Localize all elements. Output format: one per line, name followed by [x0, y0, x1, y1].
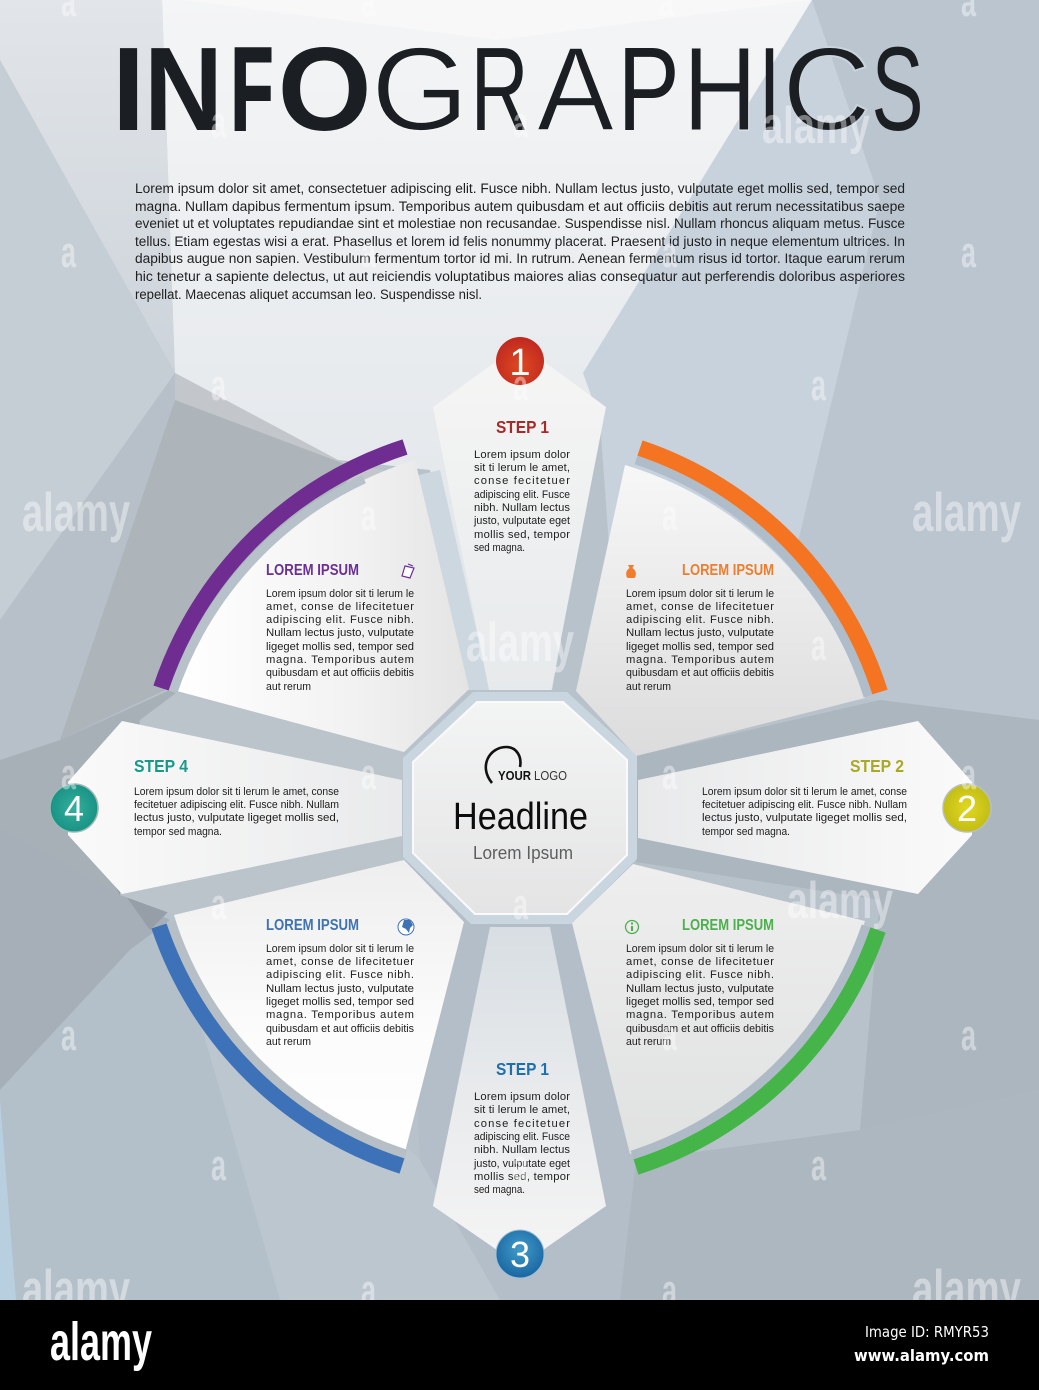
intro text block: eveniet ut et voluptates repudiandae sint et molestiae non recusandae. Suspendisse nisl. Nullam rhoncus aliquam metus. Fusce — [135, 216, 905, 231]
purple text: magna. Temporibus autem — [266, 654, 414, 666]
title: P — [618, 23, 680, 156]
icon: info — [626, 920, 638, 934]
title: I — [758, 23, 780, 156]
blue heading: LOREM IPSUM — [266, 917, 359, 934]
step 3 text: sit ti lerum le amet, — [474, 1104, 570, 1116]
watermark: a — [61, 750, 76, 799]
orange heading: LOREM IPSUM — [682, 562, 774, 579]
blue arc — [159, 926, 402, 1166]
intro text block: magna. Nullam dapibus fermentum ipsum. Temporibus autem quibusdam et aut officiis debitis aut rerum necessitatibus saepe — [135, 199, 905, 214]
badge 2 — [943, 784, 991, 832]
panel: step 3 — [433, 927, 606, 1278]
title: H — [683, 23, 757, 156]
blue text: ligeget mollis sed, tempor sed — [266, 996, 414, 1008]
title: R — [471, 23, 529, 156]
blue text: Lorem ipsum dolor sit ti lerum le — [266, 943, 414, 955]
green text: Lorem ipsum dolor sit ti lerum le — [626, 943, 774, 955]
step 3 heading: STEP 1 — [496, 1059, 549, 1079]
intro text block: tellus. Etiam egestas wisi a erat. Phasellus et lorem id felis nonummy placerat. Praesent id justo in neque elementum ultrices. In — [135, 234, 905, 249]
panel: step 1 — [433, 337, 606, 690]
step 4 text: Lorem ipsum dolor sit ti lerum le amet, conse — [134, 786, 339, 798]
subheadline: Lorem Ipsum — [473, 842, 573, 863]
step 3 text: Lorem ipsum dolor — [474, 1091, 570, 1103]
badge 3 — [496, 1230, 544, 1278]
green text: aut rerum — [626, 1036, 671, 1048]
icon: note — [402, 564, 414, 578]
green heading: LOREM IPSUM — [682, 917, 774, 934]
green arc — [636, 930, 878, 1167]
website: www.alamy.com — [854, 1346, 989, 1365]
title: I — [112, 23, 145, 156]
watermark: a — [211, 1141, 226, 1190]
orange text: aut rerum — [626, 681, 671, 693]
watermark: a — [211, 880, 226, 929]
orange text: Lorem ipsum dolor sit ti lerum le — [626, 588, 774, 600]
watermark: a — [361, 1266, 376, 1315]
blue text: adipiscing elit. Fusce nibh. — [266, 969, 414, 981]
orange text: magna. Temporibus autem — [626, 654, 774, 666]
orange text: ligeget mollis sed, tempor sed — [626, 641, 774, 653]
orange text: adipiscing elit. Fusce nibh. — [626, 614, 774, 626]
watermark: a — [961, 750, 976, 799]
panel: blue quarter — [159, 860, 464, 1166]
badge 1 — [496, 337, 544, 385]
title — [112, 23, 924, 156]
watermark: alamy — [762, 97, 870, 155]
step 3 text: justo, vulputate eget — [473, 1158, 571, 1170]
intro text block: Lorem ipsum dolor sit amet, consectetuer adipiscing elit. Fusce nibh. Nullam lectus justo, vulputate eget mollis sed, tempor sed — [135, 181, 905, 196]
watermark: a — [662, 750, 677, 799]
step 4 text: tempor sed magna. — [134, 826, 222, 838]
step 1 text: sit ti lerum le amet, — [474, 462, 570, 474]
footer logo: alamy — [50, 1312, 152, 1372]
watermark: a — [513, 98, 528, 147]
step 3 text: conse fecitetuer — [474, 1118, 570, 1130]
step 4 heading: STEP 4 — [134, 756, 188, 776]
purple text — [266, 588, 414, 693]
step 1 text: mollis sed, tempor — [474, 529, 570, 541]
watermark: a — [662, 228, 677, 277]
watermark: a — [662, 491, 677, 540]
step 1 text: Lorem ipsum dolor — [474, 449, 570, 461]
badge 1: 1 — [509, 342, 531, 384]
green text: amet, conse de lifecitetuer — [626, 956, 774, 968]
blue text: aut rerum — [266, 1036, 311, 1048]
blue text: magna. Temporibus autem — [266, 1009, 414, 1021]
step 3 text — [473, 1091, 571, 1196]
step 2 text: fecitetuer adipiscing elit. Fusce nibh. Nullam — [702, 799, 907, 811]
blue text: quibusdam et aut officiis debitis — [266, 1023, 414, 1035]
blue text: Nullam lectus justo, vulputate — [266, 983, 414, 995]
step 1 text: justo, vulputate eget — [473, 515, 571, 527]
intro text block — [135, 181, 905, 302]
watermark: a — [61, 228, 76, 277]
panel: purple quarter — [161, 447, 469, 752]
step 2 heading: STEP 2 — [850, 756, 904, 776]
panel: green quarter — [572, 864, 878, 1167]
step 2 text: tempor sed magna. — [702, 826, 790, 838]
watermark: a — [361, 228, 376, 277]
blue text — [266, 943, 414, 1048]
purple text: ligeget mollis sed, tempor sed — [266, 641, 414, 653]
purple text: Nullam lectus justo, vulputate — [266, 627, 414, 639]
intro text block: dapibus augue non sapien. Vestibulum fermentum tortor id mi. In rutrum. Aenean fermentum risus id tortor. Itaque earum rerum — [135, 251, 905, 266]
step 3 text: mollis sed, tempor — [474, 1171, 570, 1183]
orange text: Nullam lectus justo, vulputate — [626, 627, 774, 639]
watermark: alamy — [466, 611, 574, 673]
title: S — [872, 23, 924, 156]
logo: YOUR — [498, 769, 531, 783]
watermark: a — [211, 98, 226, 147]
step 1 text: nibh. Nullam lectus — [474, 502, 570, 514]
green text — [626, 943, 774, 1048]
green text: quibusdam et aut officiis debitis — [626, 1023, 774, 1035]
orange text: quibusdam et aut officiis debitis — [626, 667, 774, 679]
step 4 text — [134, 786, 339, 838]
step 1 text — [473, 449, 571, 554]
purple arc — [161, 447, 405, 688]
step 1 heading: STEP 1 — [496, 417, 549, 437]
image id: Image ID: RMYR53 — [865, 1323, 989, 1341]
purple heading: LOREM IPSUM — [266, 562, 359, 579]
watermark: a — [361, 750, 376, 799]
watermark: a — [811, 1141, 826, 1190]
intro text block: repellat. Maecenas aliquet accumsan leo. Suspendisse nisl. — [135, 287, 482, 302]
badge 4 — [50, 784, 98, 832]
step 3 text: adipiscing elit. Fusce — [474, 1131, 570, 1143]
headline: Headline — [453, 796, 588, 838]
orange arc — [640, 448, 880, 692]
watermark: a — [662, 1266, 677, 1315]
title: C — [782, 23, 871, 156]
logo: LOGO — [534, 769, 567, 783]
watermark: a — [211, 361, 226, 410]
title: O — [278, 23, 372, 156]
purple text: aut rerum — [266, 681, 311, 693]
step 4 text: lectus justo, vulputate ligeget mollis sed, — [134, 812, 339, 824]
watermark: a — [61, 1011, 76, 1060]
step 1 text: adipiscing elit. Fusce — [474, 489, 570, 501]
watermark: a — [361, 491, 376, 540]
center octagon — [403, 692, 637, 924]
step 1 text: conse fecitetuer — [474, 475, 570, 487]
watermark: alamy — [22, 481, 130, 543]
green text: adipiscing elit. Fusce nibh. — [626, 969, 774, 981]
watermark: a — [961, 1011, 976, 1060]
step 2 text: Lorem ipsum dolor sit ti lerum le amet, conse — [702, 786, 907, 798]
badge 3: 3 — [510, 1234, 530, 1275]
watermark: alamy — [787, 872, 893, 930]
blue text: amet, conse de lifecitetuer — [266, 956, 414, 968]
orange text — [626, 588, 774, 693]
watermark: a — [811, 361, 826, 410]
intro text block: hic tenetur a sapiente delectus, ut aut reiciendis voluptatibus maiores alias consequatur aut perferendis doloribus asperiores — [135, 269, 905, 284]
icon: money bag — [626, 565, 636, 578]
watermark: a — [513, 1141, 528, 1190]
step 3 text: nibh. Nullam lectus — [474, 1144, 570, 1156]
step 2 text — [702, 786, 907, 838]
watermark: a — [662, 1011, 677, 1060]
watermark: alamy — [22, 1258, 130, 1320]
purple text: quibusdam et aut officiis debitis — [266, 667, 414, 679]
watermark: a — [513, 880, 528, 929]
badge 4: 4 — [64, 788, 84, 829]
title: N — [144, 23, 223, 156]
purple text: Lorem ipsum dolor sit ti lerum le — [266, 588, 414, 600]
watermark: a — [961, 228, 976, 277]
purple text: amet, conse de lifecitetuer — [266, 601, 414, 613]
green text: ligeget mollis sed, tempor sed — [626, 996, 774, 1008]
step 2 text: lectus justo, vulputate ligeget mollis sed, — [702, 812, 907, 824]
footer bar — [0, 1300, 1039, 1390]
icon: globe — [398, 919, 414, 935]
logo — [486, 747, 567, 783]
badge 2: 2 — [957, 788, 977, 829]
step 4 text: fecitetuer adipiscing elit. Fusce nibh. Nullam — [134, 799, 339, 811]
step 1 text: sed magna. — [474, 542, 525, 554]
panel: orange quarter — [576, 448, 880, 756]
title: A — [537, 23, 615, 156]
watermark: a — [811, 621, 826, 670]
green text: magna. Temporibus autem — [626, 1009, 774, 1021]
orange text: amet, conse de lifecitetuer — [626, 601, 774, 613]
green text: Nullam lectus justo, vulputate — [626, 983, 774, 995]
step 3 text: sed magna. — [474, 1184, 525, 1196]
purple text: adipiscing elit. Fusce nibh. — [266, 614, 414, 626]
panel: step 4 — [50, 721, 402, 894]
title: G — [371, 23, 469, 156]
watermark: a — [513, 361, 528, 410]
title: F — [230, 23, 274, 156]
panel: step 2 — [638, 721, 991, 894]
